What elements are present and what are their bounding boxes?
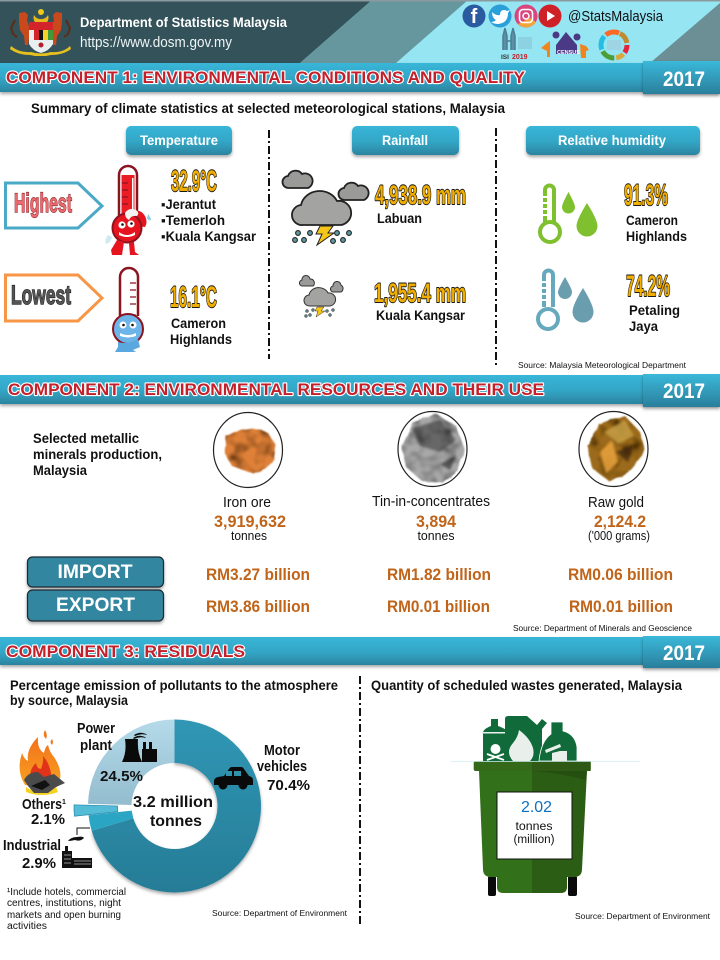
- label: power plant: Power: [77, 720, 115, 737]
- station: Cameron Highlands: Cameron: [626, 213, 678, 228]
- divider dashed: [359, 676, 361, 926]
- value: highest rainfall: 4,938.9 mm: [375, 180, 466, 210]
- stations: highest temperature: [161, 197, 257, 244]
- iron ore label: Iron ore: [223, 495, 271, 511]
- icon: facebook: f: [471, 6, 478, 28]
- footnote: activities: [7, 921, 47, 932]
- station: Labuan: Labuan: [377, 211, 422, 226]
- tin label: [372, 494, 490, 543]
- logo: ISI 2019: ISI: [501, 54, 509, 61]
- label: power plant: 24.5%: [100, 768, 143, 785]
- button: temperature: Temperature: [140, 133, 218, 148]
- header URL: https://www.dosm.gov.my: [80, 35, 233, 51]
- import values: [206, 565, 673, 584]
- label: power plant: plant: [80, 737, 112, 754]
- import values: RM1.82 billion: [387, 565, 491, 584]
- emissions title: Percentage emission of pollutants to the atmosphere: [10, 678, 338, 693]
- waste value box: 2.02: [521, 799, 552, 816]
- icon: blue humidity: [538, 270, 594, 329]
- logo: ISI 2019: [501, 28, 532, 61]
- footnote: ¹Include hotels, commercial: [7, 887, 126, 898]
- icon: coat of arms: [10, 9, 71, 56]
- subtitle: climate summary: Summary of climate statistics at selected meteorological stations, Malaysia: [31, 101, 505, 116]
- station: lowest temperature: Cameron: [171, 316, 226, 331]
- panel: temperature: [6, 126, 257, 352]
- wastes title: Quantity of scheduled wastes generated, Malaysia: [371, 678, 682, 693]
- page header band: [0, 0, 720, 63]
- panel: temperature: 32.9°C: [171, 165, 217, 198]
- label: others: Others: [22, 796, 62, 813]
- value: lowest temperature: 16.1°C: [170, 281, 217, 314]
- icon: green humidity: [540, 186, 598, 242]
- donut centre total: [133, 794, 213, 830]
- button: export: EXPORT: [56, 595, 135, 616]
- banner: component 1: [0, 61, 720, 94]
- icon: cold thermometer: [113, 268, 143, 352]
- logo: SDG wheel: [601, 32, 627, 58]
- tin label: 3,894: [416, 512, 457, 531]
- donut chart: [74, 720, 261, 892]
- icon: iron ore: [214, 412, 282, 488]
- divider dashed: [268, 130, 270, 359]
- icon: factory: [62, 828, 92, 868]
- year badge 1: 2017: [663, 68, 705, 91]
- tin label: Tin-in-concentrates: [372, 494, 490, 510]
- panel: relative humidity: [518, 126, 700, 370]
- icon: small storm cloud: [299, 275, 343, 317]
- minerals heading: [33, 431, 162, 478]
- source: emissions: Source: Department of Environment: [212, 908, 348, 918]
- minerals heading: minerals production,: [33, 447, 162, 462]
- banner: component 1: COMPONENT 1: ENVIRONMENTAL CONDITIONS AND QUALITY: [6, 69, 525, 87]
- waste value box: (million): [514, 834, 555, 846]
- icon: waste containers: [482, 716, 577, 761]
- label: industrial: Industrial: [3, 837, 61, 854]
- import values: RM3.27 billion: [206, 565, 310, 584]
- button: export: [28, 590, 164, 621]
- icon: large storm cloud: [282, 171, 369, 245]
- icon: youtube: [538, 4, 562, 28]
- emissions title: by source, Malaysia: [10, 693, 128, 708]
- value: lowest rainfall: 1,955.4 mm: [374, 278, 466, 308]
- panel: rainfall: [282, 126, 466, 323]
- label: others: 1: [62, 799, 66, 806]
- icon: green bin: [451, 761, 640, 896]
- button: relative humidity: [526, 126, 700, 155]
- label: motor vehicles: Motor: [264, 742, 300, 759]
- label: others: [22, 796, 66, 828]
- export values: [206, 597, 673, 616]
- logo: census: CENSUS: [557, 50, 580, 56]
- station: Petaling Jaya: Petaling: [629, 303, 680, 318]
- icon: twitter: [488, 4, 512, 28]
- station: Cameron Highlands: [626, 213, 687, 244]
- station: Petaling Jaya: [629, 303, 680, 334]
- footnote: [7, 887, 126, 932]
- icon: power plant: [122, 733, 157, 762]
- stations: highest temperature: ▪Temerloh: [161, 213, 225, 228]
- iron ore label: tonnes: [231, 529, 267, 543]
- banner: component 2: [0, 374, 720, 407]
- icon: car: [214, 767, 253, 790]
- button: temperature: [126, 126, 232, 155]
- year badge 2: [643, 374, 720, 407]
- donut centre total: 3.2 million: [133, 794, 213, 811]
- stations: highest temperature: ▪Jerantut: [161, 197, 216, 212]
- gold label: ('000 grams): [588, 529, 650, 543]
- banner: component 3: COMPONENT 3: RESIDUALS: [6, 643, 245, 661]
- button: rainfall: [352, 126, 459, 155]
- arrow: highest: [6, 183, 102, 228]
- station: lowest temperature: [170, 316, 232, 347]
- value: lowest humidity: 74.2%: [626, 270, 670, 303]
- button: import: [28, 557, 164, 587]
- source: minerals: Source: Department of Minerals and Geoscience: [513, 623, 692, 633]
- panel: metallic minerals: [28, 412, 692, 633]
- footnote: markets and open burning: [7, 910, 121, 921]
- waste value box: [497, 792, 572, 859]
- year badge 1: [643, 61, 720, 94]
- arrow: lowest: Lowest: [11, 280, 71, 310]
- label: industrial: 2.9%: [22, 855, 56, 872]
- panel: pollutant emissions: [3, 678, 348, 932]
- label: power plant: [77, 720, 143, 785]
- label: motor vehicles: [257, 742, 310, 794]
- year badge 2: 2017: [663, 380, 705, 403]
- gold label: [588, 495, 650, 543]
- station: lowest temperature: Highlands: [170, 332, 232, 347]
- gold label: 2,124.2: [594, 512, 646, 531]
- logo: ISI 2019: 2019: [512, 54, 528, 61]
- label: industrial: [3, 837, 61, 872]
- donut centre total: tonnes: [150, 813, 202, 830]
- logo: census: [541, 32, 589, 58]
- button: rainfall: Rainfall: [382, 133, 428, 148]
- gold label: Raw gold: [588, 495, 644, 511]
- button: relative humidity: Relative humidity: [558, 133, 666, 148]
- stations: highest temperature: ▪Kuala Kangsar: [161, 229, 257, 244]
- icon: facebook: [462, 4, 486, 28]
- year badge 3: [643, 636, 720, 668]
- icon: fire: [20, 730, 65, 795]
- divider dashed: [495, 128, 497, 366]
- year badge 3: 2017: [663, 642, 705, 665]
- banner: component 2: COMPONENT 2: ENVIRONMENTAL RESOURCES AND THEIR USE: [8, 381, 544, 399]
- minerals heading: Selected metallic: [33, 431, 139, 446]
- label: motor vehicles: vehicles: [257, 758, 307, 775]
- iron ore label: [214, 495, 286, 543]
- label: others: 2.1%: [31, 811, 65, 828]
- arrow: lowest: [6, 275, 102, 321]
- import values: RM0.06 billion: [568, 565, 673, 584]
- icon: hot thermometer: [105, 166, 151, 255]
- value: highest humidity: 91.3%: [624, 179, 668, 212]
- minerals heading: Malaysia: [33, 463, 87, 478]
- export values: RM0.01 billion: [387, 597, 490, 616]
- export values: RM3.86 billion: [206, 597, 310, 616]
- station: Cameron Highlands: Highlands: [626, 229, 687, 244]
- header title: Department of Statistics Malaysia: [80, 14, 287, 30]
- export values: RM0.01 billion: [569, 597, 673, 616]
- arrow: highest: Highest: [14, 188, 72, 218]
- waste value box: tonnes: [516, 821, 553, 833]
- banner: component 3: [0, 636, 720, 668]
- icon: gold: [579, 412, 648, 486]
- label: motor vehicles: 70.4%: [267, 777, 310, 794]
- footnote: centres, institutions, night: [7, 898, 121, 909]
- social handle: @StatsMalaysia: [568, 9, 664, 25]
- station: Petaling Jaya: Jaya: [629, 319, 658, 334]
- iron ore label: 3,919,632: [214, 512, 286, 531]
- panel: scheduled wastes: [371, 678, 711, 921]
- station: Kuala Kangsar: Kuala Kangsar: [376, 308, 466, 323]
- source: meteorological: Source: Malaysia Meteorological Department: [518, 360, 687, 370]
- button: import: IMPORT: [58, 562, 133, 583]
- tin label: tonnes: [418, 529, 454, 543]
- icon: instagram: [514, 4, 538, 28]
- emissions title: [10, 678, 338, 708]
- icon: tin: [398, 412, 467, 486]
- source: wastes: Source: Department of Environment: [575, 911, 711, 921]
